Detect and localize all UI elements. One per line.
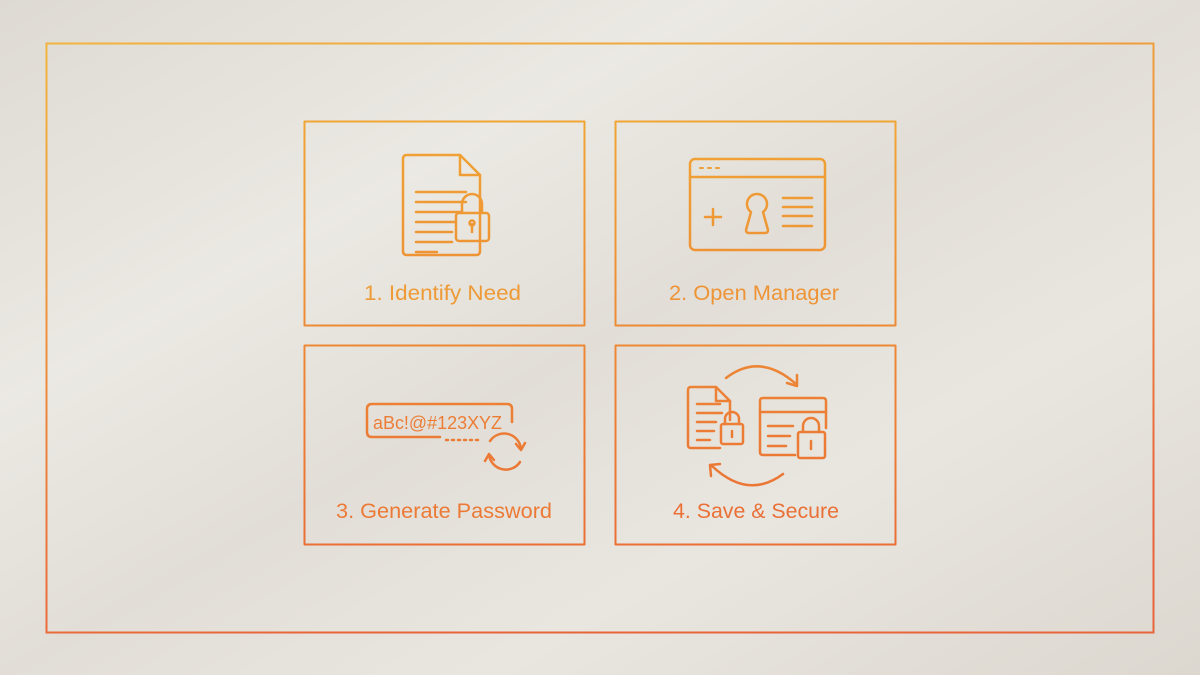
icon: password field with refresh: aBc!@#123XYZ	[373, 413, 502, 433]
panel: open manager	[616, 122, 896, 326]
panel: save and secure	[616, 346, 896, 544]
panel: generate password	[304, 346, 584, 544]
icon: browser keyhole	[690, 159, 825, 250]
icon: document with lock	[403, 155, 489, 255]
icon: doc and browser sync	[688, 366, 826, 485]
panel: identify need	[304, 122, 584, 326]
label 2: 2. Open Manager	[669, 282, 839, 305]
label 3: 3. Generate Password	[336, 500, 552, 523]
label 4: 4. Save & Secure	[673, 500, 839, 523]
label 1: 1. Identify Need	[364, 282, 521, 305]
icon: password field with refresh	[367, 404, 525, 470]
